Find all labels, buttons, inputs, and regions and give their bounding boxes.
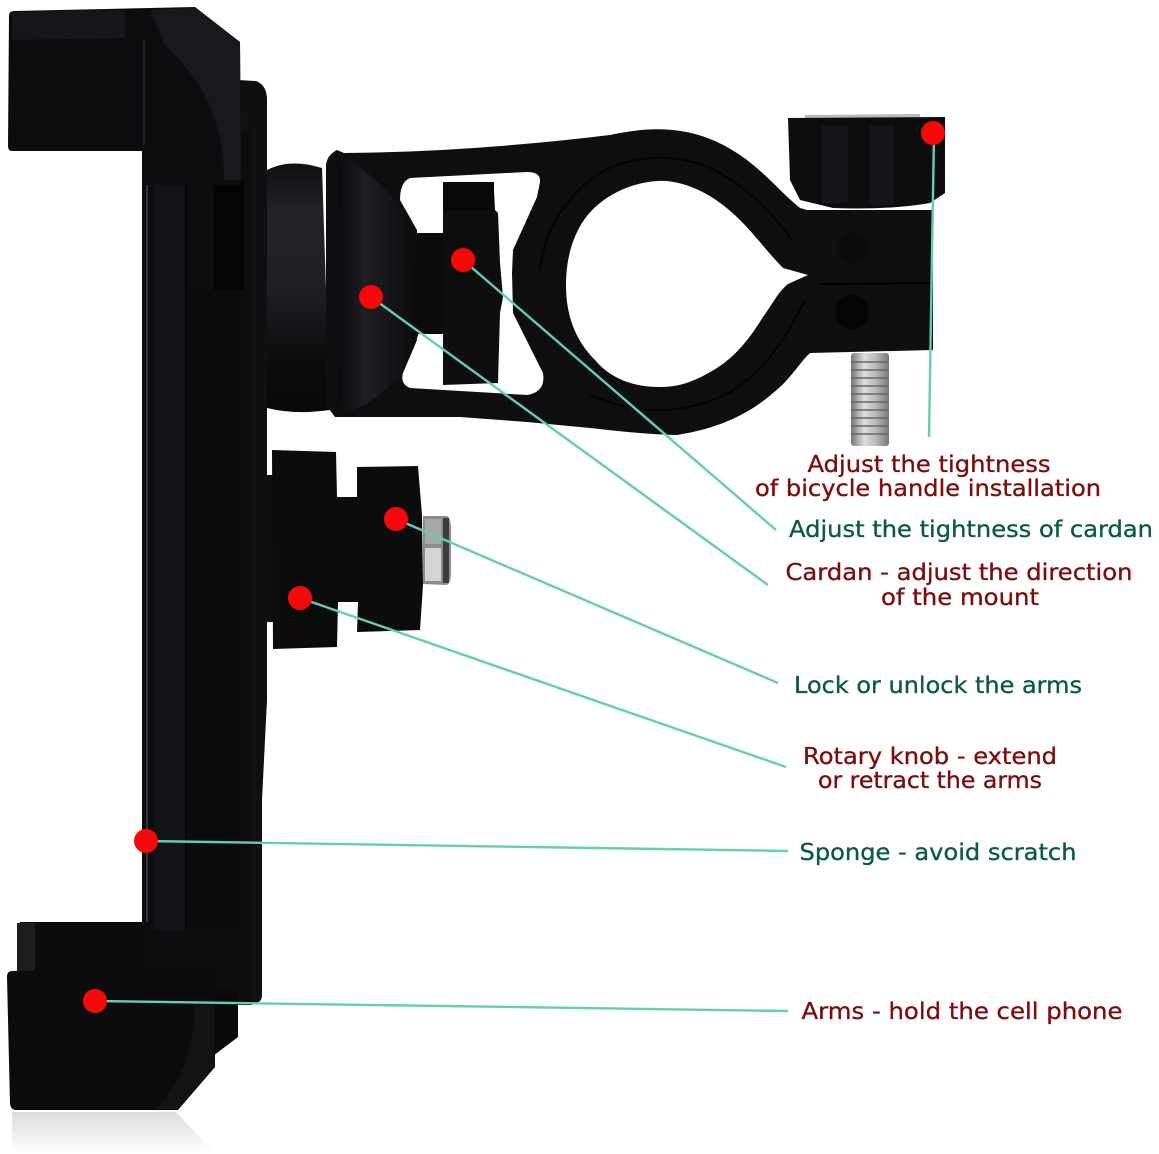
label: cardan direction: Cardan - adjust the direction (786, 560, 1132, 586)
top adjusting knob (788, 114, 945, 208)
label: cardan tightness: Adjust the tightness of cardan (789, 517, 1153, 543)
label: retract arms: or retract the arms (818, 768, 1042, 794)
side rail (238, 80, 267, 1005)
label: bicycle handle tightness: Adjust the tightness (808, 452, 1050, 478)
label: rotary knob: Rotary knob - extend (803, 744, 1057, 770)
central column (142, 130, 252, 1005)
label: sponge: Sponge - avoid scratch (800, 840, 1076, 866)
label: bicycle handle installation: of bicycle handle installation (755, 476, 1101, 502)
label: arms: Arms - hold the cell phone (802, 999, 1122, 1025)
block seam and holes (820, 283, 932, 284)
cardan neck and knob (417, 182, 503, 385)
nut (423, 516, 451, 585)
red markers (83, 121, 945, 1013)
lower back body (205, 990, 238, 1062)
top arm (8, 7, 241, 185)
phone holder body (7, 7, 267, 1110)
leader lines (95, 134, 934, 1011)
bottom arm front (7, 968, 215, 1110)
label: lock arms: Lock or unlock the arms (794, 673, 1082, 699)
reflection under bottom arm (12, 1112, 215, 1154)
bicycle mount clamp (326, 129, 933, 435)
arm lock knobs and nut (262, 450, 451, 649)
label: of the mount: of the mount (881, 585, 1039, 611)
threaded bolt (851, 353, 889, 446)
ring grooves (540, 158, 792, 270)
cardan ball joint (267, 163, 330, 412)
bottom arm back (17, 922, 148, 975)
cup shading (336, 158, 418, 413)
